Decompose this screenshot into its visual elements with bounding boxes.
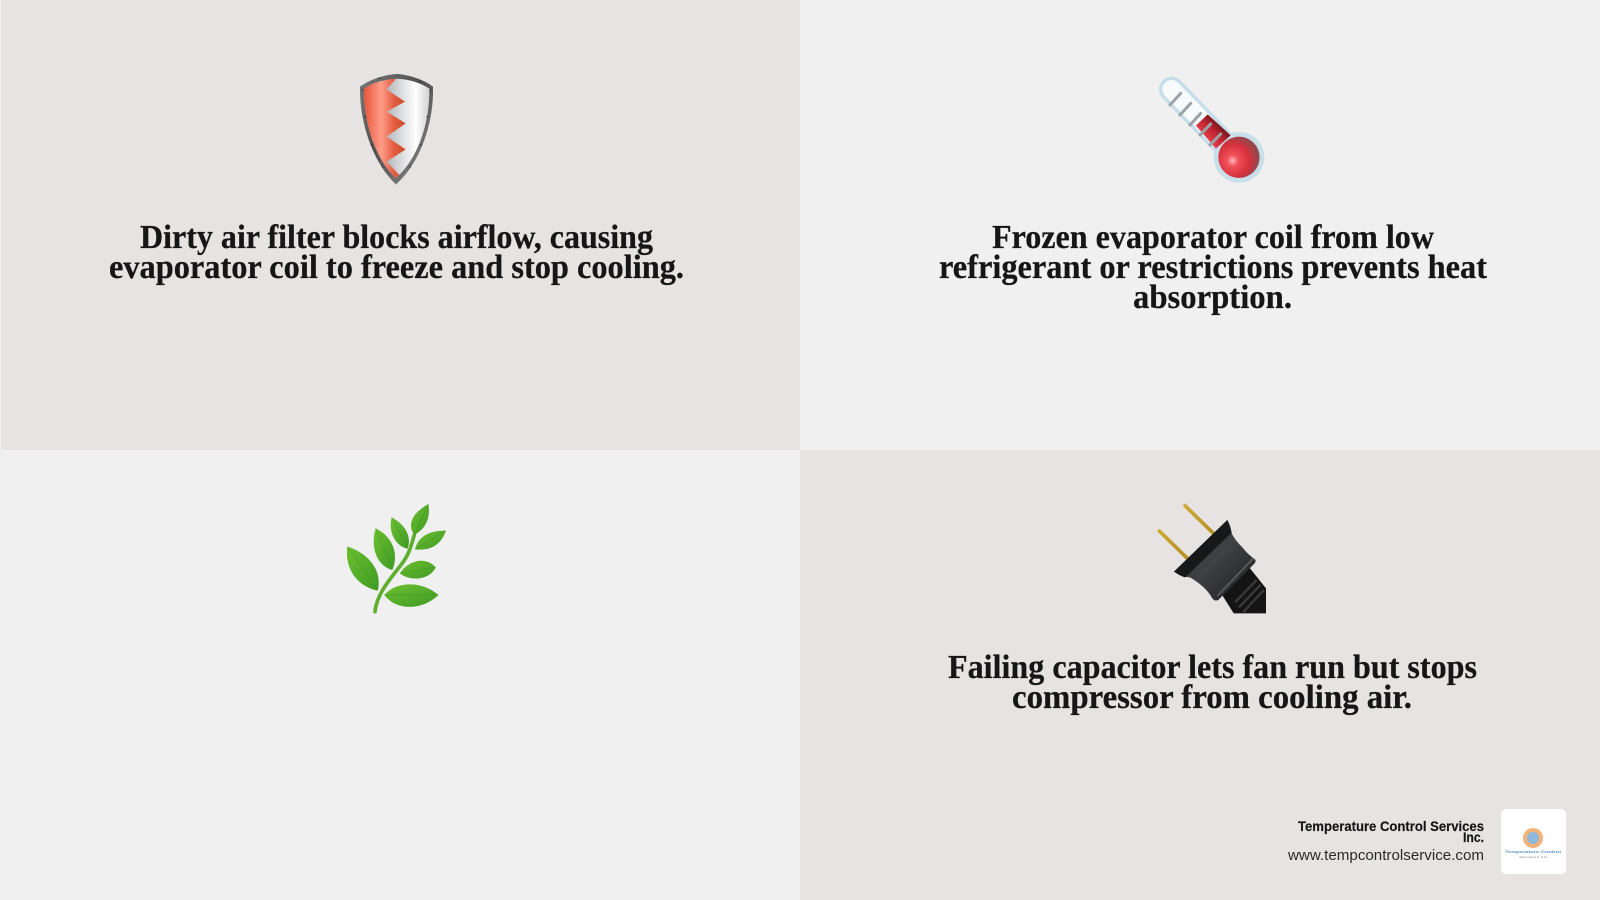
heading: capacitor text: compressor from cooling air. — [1012, 679, 1412, 716]
company logo — [1501, 809, 1566, 874]
heading: dirty air filter text: Dirty air filter blocks airflow, causing — [140, 219, 653, 256]
company website: www.tempcontrolservice.com — [1287, 847, 1484, 864]
company name: Temperature Control Services — [1298, 819, 1484, 834]
heading: capacitor text: Failing capacitor lets fan run but stops — [948, 649, 1477, 686]
panel background — [800, 0, 1600, 450]
footer: company branding — [1287, 809, 1566, 874]
panel: plant icon — [0, 450, 800, 900]
panel: failing capacitor — [800, 450, 1600, 900]
company logo: Temperature Control — [1505, 849, 1561, 854]
icon: shield — [360, 73, 433, 185]
icon: leafy branch — [347, 504, 446, 612]
panel background — [0, 450, 800, 900]
icon: electric plug — [1159, 506, 1272, 623]
heading: frozen coil text: refrigerant or restrictions prevents heat — [939, 249, 1488, 286]
panel: dirty air filter — [1, 0, 800, 450]
heading: dirty air filter text — [109, 219, 684, 286]
company name — [1298, 819, 1484, 845]
icon: thermometer — [1170, 89, 1264, 183]
heading: frozen coil text: absorption. — [1133, 279, 1292, 316]
heading: frozen coil text — [939, 219, 1488, 316]
panel background — [1, 0, 800, 450]
company name: Inc. — [1463, 830, 1484, 845]
heading: capacitor text — [948, 649, 1477, 716]
heading: frozen coil text: Frozen evaporator coil from low — [992, 219, 1434, 256]
panel: frozen evaporator coil — [800, 0, 1600, 450]
company logo: Services Inc. — [1519, 855, 1549, 859]
panel background — [800, 450, 1600, 900]
heading: dirty air filter text: evaporator coil to freeze and stop cooling. — [109, 249, 684, 286]
